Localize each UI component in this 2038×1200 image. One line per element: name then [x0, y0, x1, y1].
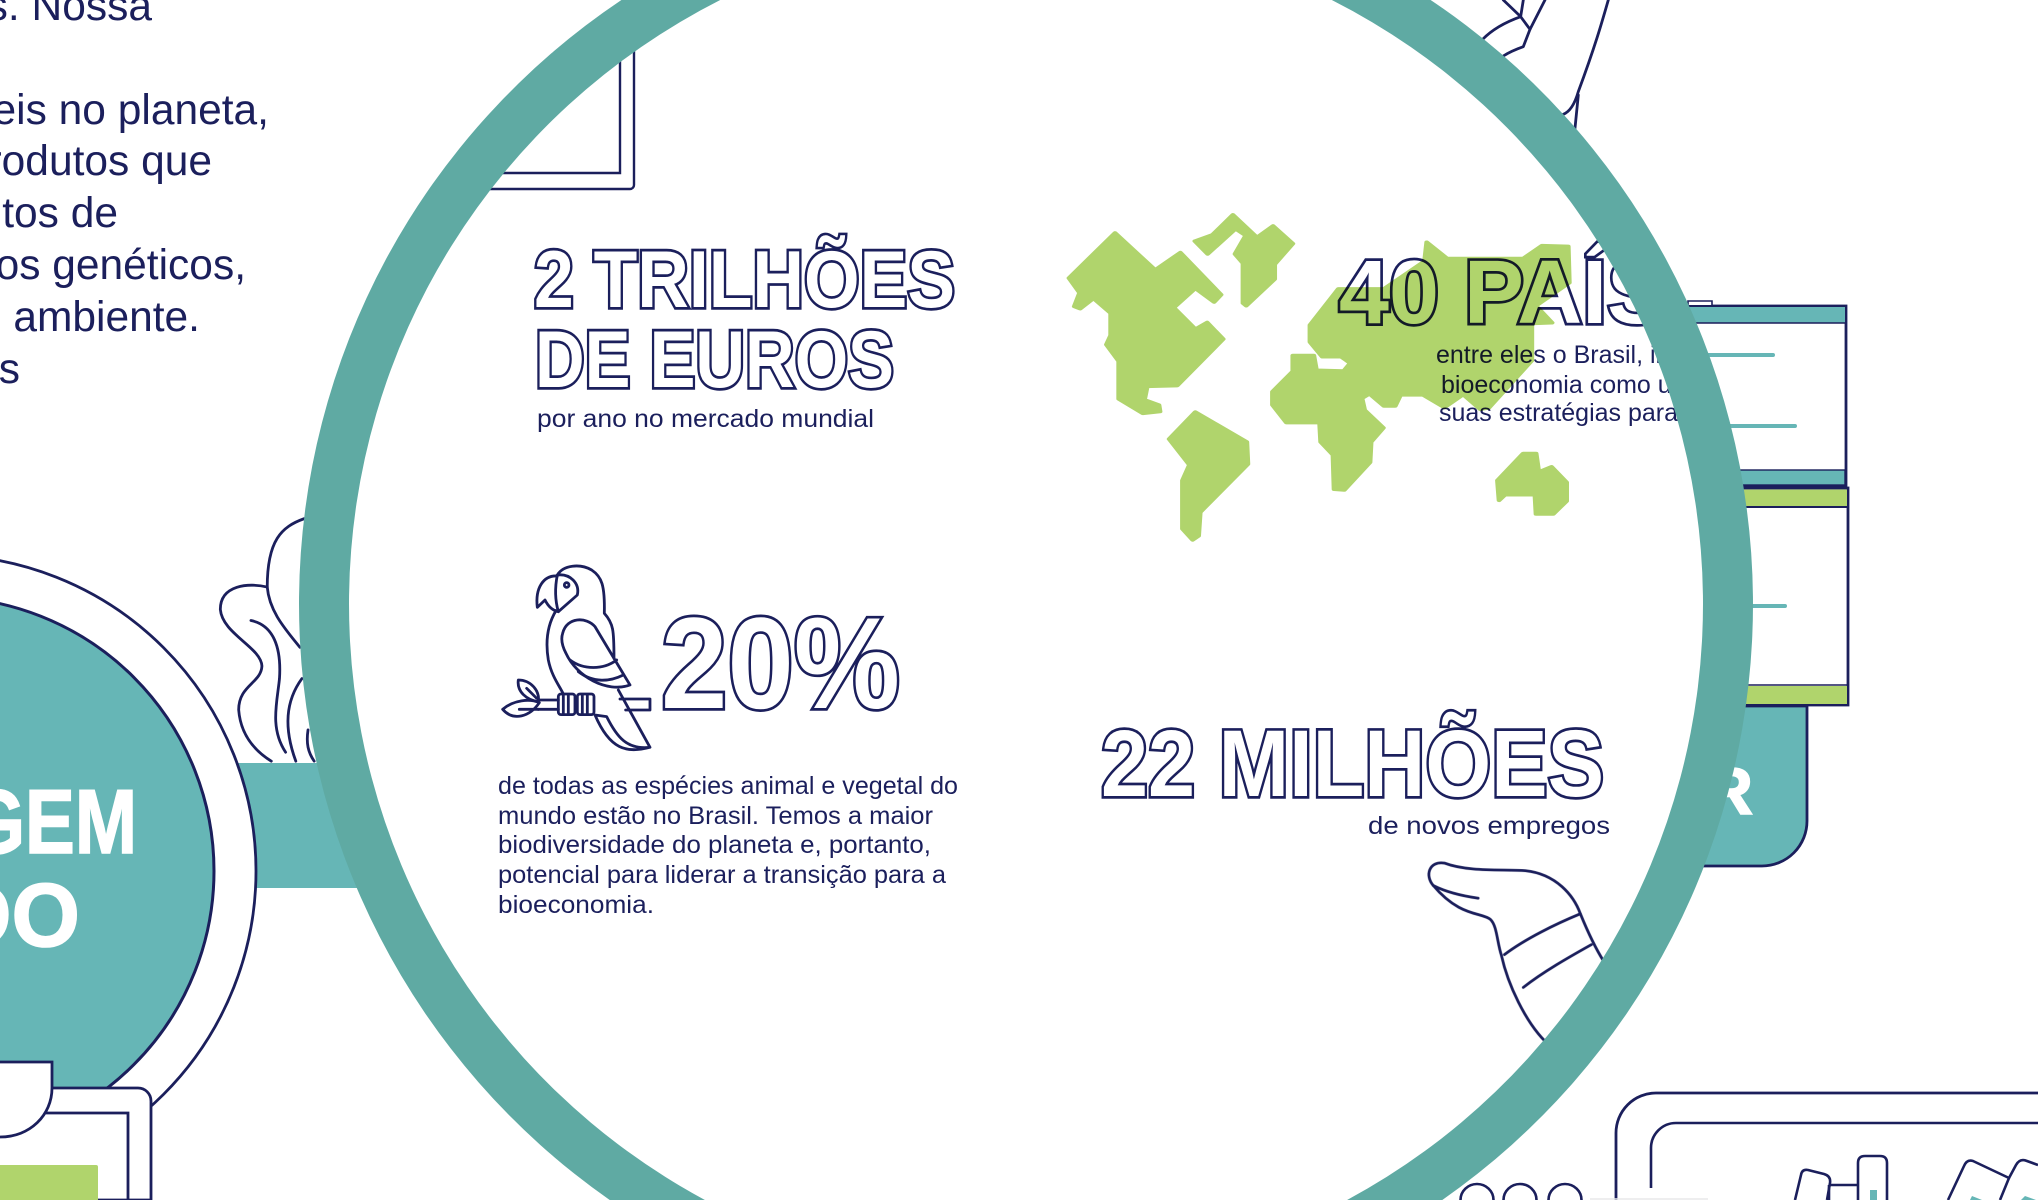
stat: 40 países: bioeconomia como uma de: [1441, 371, 1741, 399]
stat: 40 países: suas estratégias para o futuro: [1439, 399, 1770, 427]
badge: outer ring and teal circle: [0, 555, 256, 1187]
main circle white disc: [324, 0, 1728, 1200]
stat: 2 trilhões de euros: DE EUROS: [535, 315, 894, 405]
frame corner at top of circle: [460, 0, 634, 189]
stat: 40 países: [1339, 242, 1787, 427]
stat: 22 milhões: 22 MILHÕES: [1101, 711, 1604, 817]
stat: 22 milhões: de novos empregos: [1368, 812, 1610, 840]
icon: hand outline: [1429, 863, 1604, 1041]
text: biodiversity description: potencial para liderar a transição para a: [498, 861, 946, 889]
text: biodiversity description: bioeconomia.: [498, 891, 654, 919]
world map: [1069, 215, 1569, 540]
circle contents: [490, 51, 1678, 1042]
stat: 40 países: 40 PAÍSES: [1339, 242, 1787, 343]
green block: [0, 1165, 98, 1200]
text: biodiversity description: biodiversidade do planeta e, portanto,: [498, 831, 931, 859]
white tab: [0, 1062, 52, 1137]
panel: lower left device: [0, 1062, 151, 1200]
icon: plant behind the band: [220, 519, 314, 761]
panel: right lower card: [1600, 488, 1848, 705]
stat: 2 trilhões de euros: por ano no mercado mundial: [537, 405, 874, 433]
text: biodiversity description: de todas as espécies animal e vegetal do: [498, 772, 958, 800]
left intro text block: [0, 0, 269, 393]
main circle ring: [299, 0, 1753, 1200]
panel: right teal label: [1600, 706, 1807, 866]
panel: right teal label: R: [1705, 754, 1753, 829]
panel: lower right shelf device: [1460, 1093, 2038, 1200]
text: biodiversity description: [498, 772, 958, 919]
stat: 2 trilhões de euros: [534, 234, 955, 433]
icon: books: [1795, 1156, 2038, 1200]
icon: leaf lines top right: [1483, 0, 1608, 128]
stat: 40 países: entre eles o Brasil, incluíram a: [1436, 341, 1772, 369]
icon: parrot on branch: [503, 566, 650, 750]
stat: 2 trilhões de euros: 2 TRILHÕES: [534, 234, 955, 325]
text: biodiversity description: mundo estão no Brasil. Temos a maior: [498, 802, 933, 830]
stat: 20%: 20%: [661, 590, 900, 736]
band: connector from badge: [200, 763, 400, 888]
badge title: [0, 772, 137, 966]
panel: right upper card: [1600, 301, 1846, 486]
icon: three circles: [1460, 1184, 1582, 1200]
